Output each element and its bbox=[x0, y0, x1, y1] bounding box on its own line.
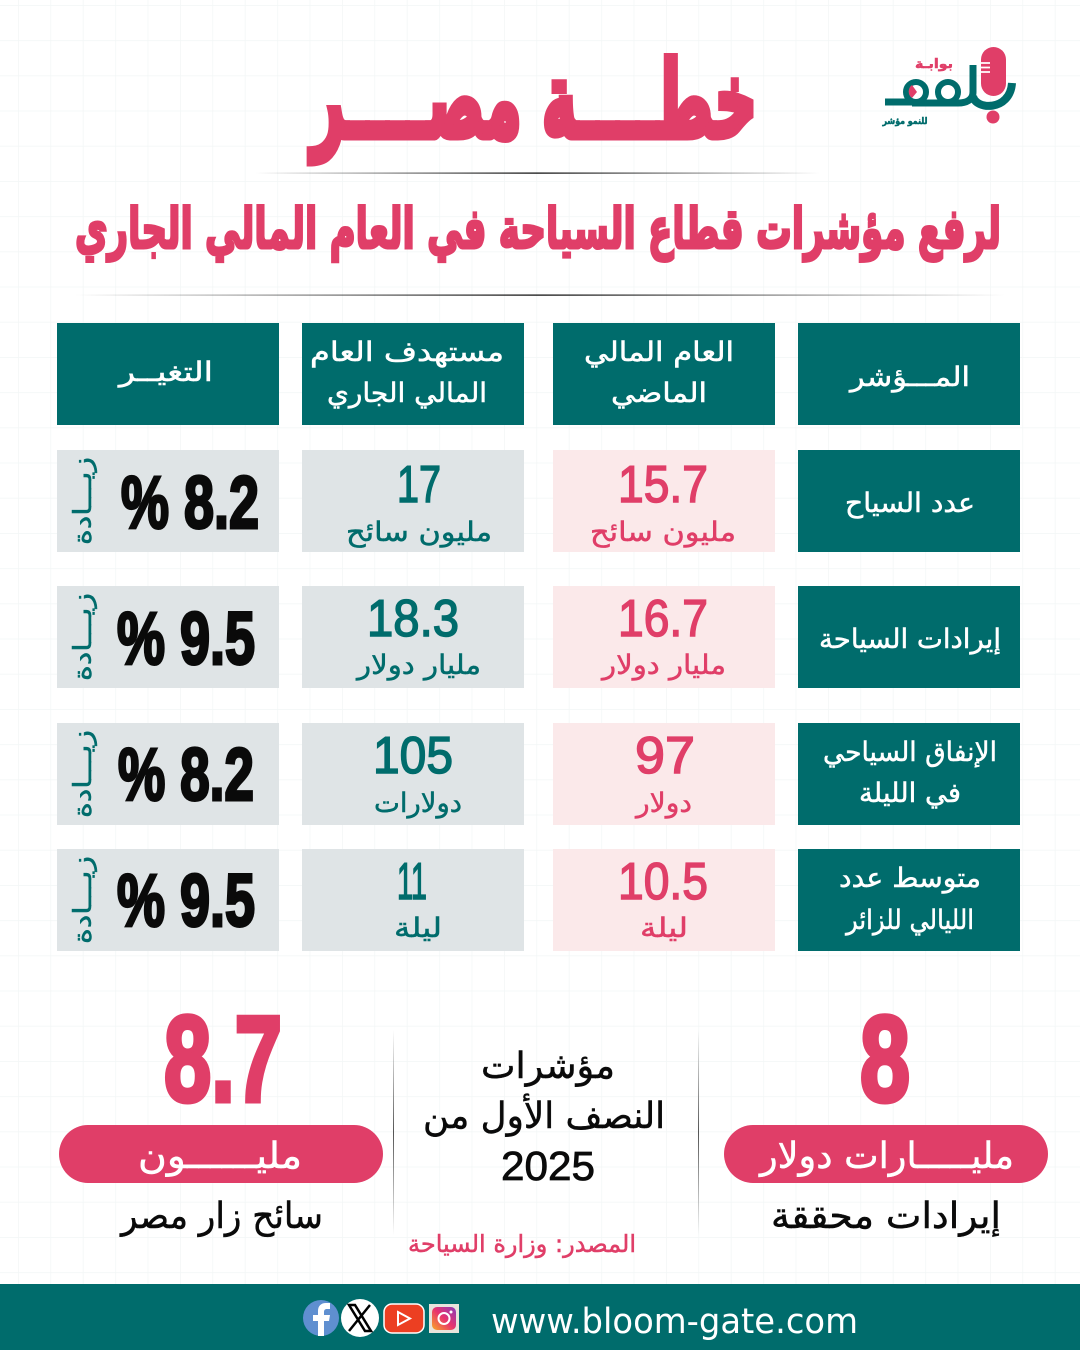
row: tourist spending per night bbox=[57, 723, 1020, 825]
row: tourist spending per night: في الليلة bbox=[859, 778, 961, 809]
row: average nights per visitor: ليلة bbox=[640, 913, 688, 944]
website url: www.bloom-gate.com bbox=[491, 1302, 858, 1342]
stat: revenue achieved: 8 bbox=[860, 991, 910, 1127]
header row: مستهدف العام bbox=[310, 337, 504, 368]
stat: revenue achieved: مليـــــارات دولار bbox=[758, 1136, 1014, 1177]
row: tourism revenue: مليار دولار bbox=[355, 650, 481, 681]
stat: tourists visited: سائح زار مصر bbox=[119, 1196, 323, 1237]
row: tourist spending per night: 97 bbox=[635, 727, 695, 785]
first half indicators text: مؤشرات bbox=[481, 1046, 615, 1087]
header row bbox=[57, 323, 1020, 425]
stat: revenue achieved: إيرادات محققة bbox=[771, 1196, 1001, 1237]
row: number of tourists: عدد السياح bbox=[845, 488, 975, 519]
divider left bbox=[393, 1030, 394, 1235]
footer bar bbox=[0, 1284, 1080, 1350]
row: number of tourists: 15.7 bbox=[618, 456, 708, 514]
row: tourist spending per night: الإنفاق السياحي bbox=[823, 737, 997, 768]
logo: Bloom Gate: بوابـة bbox=[915, 57, 953, 72]
row: number of tourists: زيـــادة bbox=[68, 457, 97, 545]
icon: facebook bbox=[303, 1300, 339, 1336]
row: number of tourists bbox=[57, 450, 1020, 552]
row: tourism revenue: 16.7 bbox=[618, 590, 708, 648]
header row: المـــؤشر bbox=[848, 362, 970, 393]
row: tourist spending per night: 105 bbox=[373, 727, 453, 785]
row: number of tourists: 17 bbox=[397, 456, 441, 514]
row: tourist spending per night: زيـــادة bbox=[68, 730, 97, 818]
first half indicators text: النصف الأول من bbox=[423, 1093, 665, 1137]
row: number of tourists: % 8.2 bbox=[121, 461, 259, 544]
row: tourism revenue: مليار دولار bbox=[600, 650, 726, 681]
row: average nights per visitor bbox=[57, 849, 1020, 951]
stat: tourists visited: مليــــــون bbox=[138, 1136, 302, 1177]
row: tourist spending per night: دولارات bbox=[374, 788, 462, 819]
header row: الماضي bbox=[611, 378, 707, 409]
logo: Bloom Gate: للنمو مؤشر bbox=[882, 117, 928, 127]
stat: tourists visited: 8.7 bbox=[164, 991, 282, 1127]
logo: Bloom Gate bbox=[882, 47, 1012, 127]
row: tourist spending per night: دولار bbox=[634, 788, 692, 819]
row: number of tourists: مليون سائح bbox=[346, 517, 492, 548]
icon: YouTube bbox=[384, 1304, 424, 1333]
row: tourism revenue bbox=[57, 586, 1020, 688]
header row: العام المالي bbox=[584, 337, 734, 368]
row: tourism revenue: 18.3 bbox=[367, 590, 459, 648]
first half indicators text: 2025 bbox=[501, 1143, 595, 1189]
header row: المالي الجاري bbox=[327, 378, 487, 409]
row: tourism revenue: % 9.5 bbox=[117, 597, 255, 680]
icon: X bbox=[341, 1299, 379, 1337]
stat: revenue achieved bbox=[724, 991, 1048, 1237]
row: average nights per visitor: % 9.5 bbox=[117, 859, 255, 942]
row: number of tourists: مليون سائح bbox=[590, 517, 736, 548]
row: average nights per visitor: الليالي للزائر bbox=[844, 905, 974, 936]
row: average nights per visitor: 11 bbox=[397, 853, 427, 911]
header row: التغيــر bbox=[117, 357, 213, 388]
row: tourist spending per night: % 8.2 bbox=[118, 733, 254, 816]
row: average nights per visitor: زيـــادة bbox=[68, 856, 97, 944]
first half indicators text bbox=[423, 1046, 665, 1189]
row: average nights per visitor: 10.5 bbox=[618, 853, 708, 911]
row: average nights per visitor: ليلة bbox=[394, 913, 442, 944]
stat: tourists visited bbox=[59, 991, 383, 1237]
row: tourism revenue: إيرادات السياحة bbox=[819, 624, 1001, 655]
row: tourism revenue: زيـــادة bbox=[68, 593, 97, 681]
divider right bbox=[698, 1030, 699, 1235]
table bbox=[57, 323, 1020, 951]
icon: Instagram bbox=[429, 1304, 459, 1333]
row: average nights per visitor: متوسط عدد bbox=[839, 863, 981, 894]
source: المصدر: وزارة السياحة bbox=[408, 1230, 636, 1258]
